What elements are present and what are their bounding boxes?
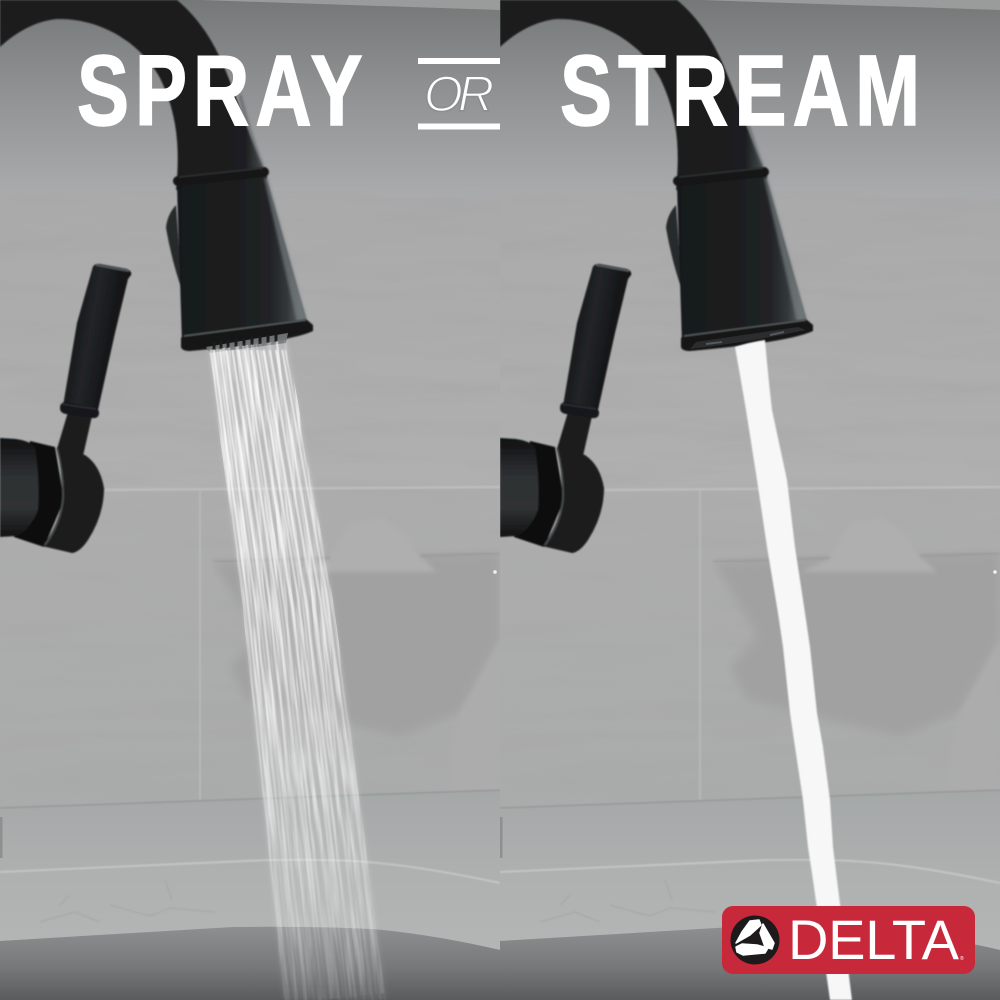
- spray nozzle outlets: [206, 333, 288, 353]
- heading: OR with rules: OR: [424, 66, 494, 122]
- logo: Delta badge: ®: [960, 955, 964, 962]
- logo wordmark: DELTA: [788, 908, 960, 971]
- background: kitchen wall, tile and counter: [500, 0, 1000, 1000]
- logo: Delta badge: [722, 906, 975, 974]
- icon: black faucet head and lever: [500, 0, 813, 553]
- background: kitchen wall, tile and counter: [0, 0, 500, 1000]
- stream nozzle underside: [690, 327, 806, 349]
- icon: black faucet head and lever: [0, 0, 313, 553]
- panel: spray photo (left): [0, 0, 500, 1000]
- heading: OR with rules: [418, 58, 500, 130]
- spray water jets: [208, 340, 386, 1000]
- icon: Delta tri-blade mark: [730, 916, 780, 964]
- stream of water: [735, 340, 852, 1000]
- heading: STREAM: STREAM: [560, 36, 926, 147]
- panel: stream photo (right): [500, 0, 1000, 1000]
- heading: SPRAY: SPRAY: [77, 36, 369, 147]
